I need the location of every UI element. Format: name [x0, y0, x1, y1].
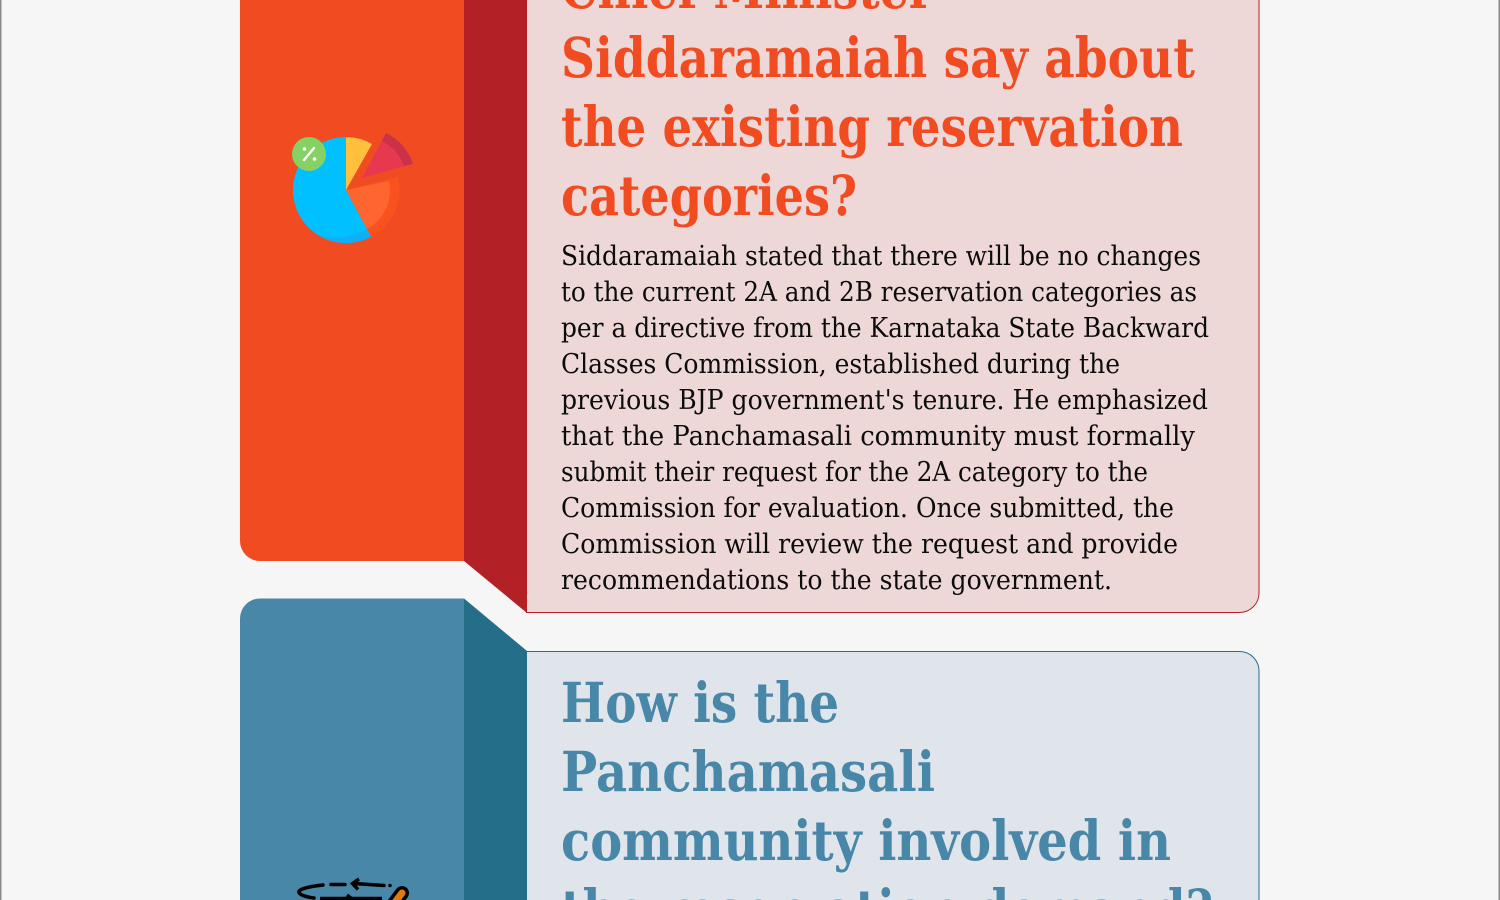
body text: that the Panchamasali community must formally: [561, 421, 1196, 452]
pink content box: [526, 0, 1259, 612]
body text: submit their request for the 2A category to the: [561, 457, 1148, 488]
heading: Panchamasali: [561, 739, 935, 804]
body text: to the current 2A and 2B reservation categories as: [561, 277, 1197, 308]
heading: [561, 670, 1213, 900]
blue side panel: [240, 598, 464, 900]
icon: rotating arrow and pencil: [299, 879, 402, 900]
body text: [561, 241, 1209, 596]
heading: the existing reservation: [561, 94, 1183, 159]
body text: per a directive from the Karnataka State Backward: [561, 313, 1209, 344]
heading: Siddaramaiah say about: [561, 25, 1195, 90]
panel: reservation categories: [240, 0, 1259, 613]
orange side panel: [240, 0, 464, 561]
heading: categories?: [561, 163, 857, 228]
body text: Commission will review the request and provide: [561, 529, 1178, 560]
pale content box: [526, 652, 1259, 900]
heading: How is the: [561, 670, 839, 735]
body text: Siddaramaiah stated that there will be no changes: [561, 241, 1201, 272]
heading: community involved in: [561, 808, 1171, 873]
heading: [561, 0, 1195, 228]
icon: pie chart with percent badge: [292, 133, 413, 243]
red fold: [464, 0, 527, 613]
body text: previous BJP government's tenure. He emphasized: [561, 385, 1208, 416]
panel: community involvement: [240, 598, 1259, 900]
teal fold: [464, 598, 527, 900]
body text: Commission for evaluation. Once submitted, the: [561, 493, 1174, 524]
body text: Classes Commission, established during the: [561, 349, 1120, 380]
body text: recommendations to the state government.: [561, 565, 1112, 596]
